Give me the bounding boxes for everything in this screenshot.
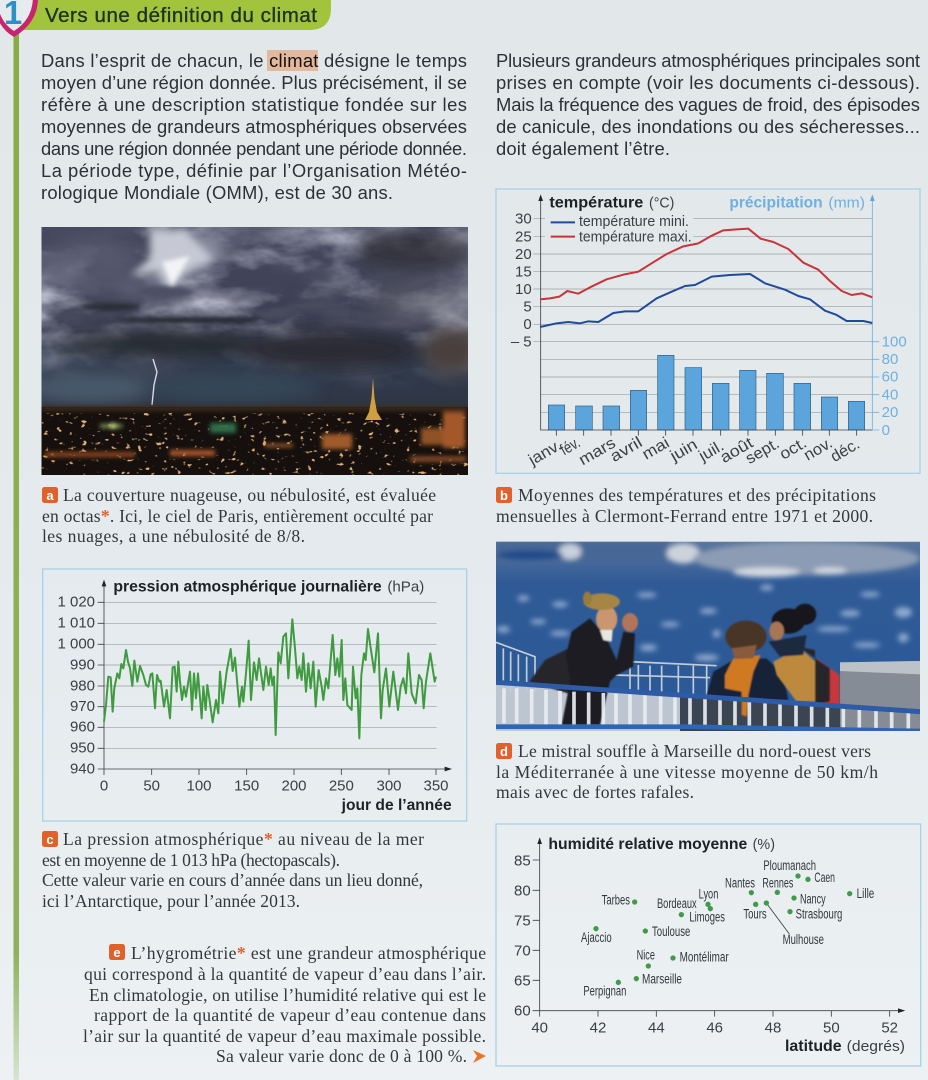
left green margin bar [14, 25, 19, 1080]
chart titles: (mm) [828, 194, 865, 211]
city labels: Marseille [642, 971, 682, 986]
precipitation scale: 80 [882, 351, 898, 368]
badge b [496, 487, 512, 503]
pressure scale: 980 [70, 677, 95, 694]
caption e: En climatologie, on utilise l’humidité relative qui est le [89, 985, 486, 1005]
intro text left column: moyen d’une région donnée. Plus précisément, il se [41, 72, 467, 93]
day scale: 50 [143, 778, 160, 795]
x axis title: latitude [785, 1038, 842, 1055]
city labels: Nice [637, 948, 655, 963]
city labels: Lille [857, 886, 874, 901]
caption a: les nuages, a une nébulosité de 8/8. [42, 526, 305, 546]
caption d: mais avec de fortes rafales. [496, 782, 694, 802]
precipitation scale: 100 [882, 334, 907, 351]
temperature scale: 10 [515, 281, 532, 298]
grey wall [840, 661, 920, 731]
caption e: l’air sur la quantité de vapeur d’eau maximale possible. [83, 1026, 486, 1046]
temperature scale: – 5 [511, 334, 532, 351]
caption b: Moyennes des températures et des précipitations [518, 485, 876, 505]
badge e [109, 944, 125, 960]
axes [533, 837, 905, 1017]
month labels: juin [667, 436, 701, 466]
intro text right column: doit également l’être. [496, 138, 670, 159]
precipitation scale: 60 [882, 369, 898, 386]
precipitation scale: 20 [882, 404, 898, 421]
day scale: 350 [423, 778, 449, 795]
latitude scale: 44 [648, 1019, 665, 1036]
precipitation scale: 0 [882, 422, 890, 439]
maximum temperature curve [540, 229, 872, 299]
month labels: avril [607, 434, 645, 466]
city labels: Tarbes [602, 893, 630, 908]
pressure scale: 950 [70, 740, 95, 757]
icon: orange arrow [473, 1050, 486, 1063]
intro text left column: dans une région donnée pendant une période donnée. [41, 138, 467, 159]
intro text right column: de canicule, des inondations ou des sécheresses... [496, 116, 920, 137]
chart titles: température [549, 194, 644, 211]
city labels: Tours [743, 907, 767, 922]
caption b: b [500, 488, 508, 503]
caption c: La pression atmosphérique* au niveau de la mer [63, 829, 424, 849]
latitude scale: 50 [823, 1019, 840, 1036]
section header [0, 0, 331, 37]
legend [551, 214, 692, 246]
caption b [496, 485, 876, 526]
intro text left column: La période type, définie par l’Organisation Météo- [41, 160, 467, 181]
latitude scale [531, 1019, 898, 1036]
lower deck and shadows [496, 682, 680, 731]
badge a [42, 487, 58, 503]
caption c: Cette valeur varie en cours d’année dans un lieu donné, [42, 870, 423, 890]
humidity scale: 80 [514, 882, 531, 899]
pressure scale: 1 010 [57, 615, 95, 632]
latitude scale: 46 [706, 1019, 723, 1036]
lightning bolt [152, 359, 157, 405]
panel: atmospheric pressure chart [43, 569, 467, 821]
city labels: Ajaccio [581, 930, 612, 945]
caption d: d [500, 744, 508, 759]
humidity scale: 85 [514, 852, 531, 869]
chart titles: précipitation [729, 194, 823, 211]
photo d: mistral in Marseille [496, 542, 920, 731]
temperature scale: 15 [515, 264, 532, 281]
pressure scale: 940 [70, 760, 95, 777]
precipitation scale [882, 334, 907, 439]
caption b: mensuelles à Clermont-Ferrand entre 1971 et 2000. [496, 506, 873, 526]
x axis title: jour de l’année [341, 797, 452, 814]
month labels: nov. [801, 435, 836, 464]
temperature scale: 0 [523, 316, 532, 333]
city at night [42, 407, 468, 475]
legend: température mini. [579, 214, 689, 230]
back railing [496, 642, 717, 695]
caption e: rapport de la quantité de vapeur d’eau contenue dans [94, 1005, 486, 1025]
caption d [496, 741, 878, 802]
photo a: storm over Paris [25, 227, 482, 475]
intro text left column: réfère à une description statistique fondée sur les [41, 94, 467, 115]
city labels: Caen [814, 870, 835, 885]
humidity scale: 75 [514, 912, 531, 929]
day scale: 0 [100, 778, 108, 795]
day scale: 300 [376, 778, 402, 795]
city labels: Montélimar [680, 950, 729, 965]
person middle [707, 621, 788, 717]
humidity scale: 70 [514, 942, 531, 959]
caption e: Sa valeur varie donc de 0 à 100 %. [216, 1046, 467, 1066]
city labels: Lyon [699, 887, 718, 902]
month labels: janv. [525, 437, 565, 470]
day scale [100, 778, 449, 795]
badge d [496, 743, 512, 759]
caption a: La couverture nuageuse, ou nébulosité, est évaluée [63, 485, 436, 505]
caption e [83, 943, 486, 1066]
chart titles: (°C) [649, 194, 674, 211]
caption e: qui correspond à la quantité de vapeur d’eau dans l’air. [84, 964, 486, 984]
latitude scale: 52 [881, 1019, 898, 1036]
temperature scale: 30 [515, 211, 532, 228]
pressure scale: 1 000 [57, 636, 95, 653]
month labels: juil. [695, 437, 727, 466]
daily pressure curve [104, 619, 436, 738]
city labels: Bordeaux [657, 896, 697, 911]
axes [538, 194, 879, 436]
month labels: août [717, 434, 757, 467]
city labels: Ploumanach [763, 858, 816, 873]
caption c: ici l’Antarctique, pour l’année 2013. [42, 891, 300, 911]
city dots [593, 873, 852, 985]
caption d: Le mistral souffle à Marseille du nord-ouest vers [518, 741, 871, 761]
temperature scale: 25 [515, 229, 532, 246]
month labels [525, 434, 863, 470]
caption c [42, 829, 424, 911]
heading text: Vers une définition du climat [45, 4, 317, 27]
intro text left column [41, 50, 467, 203]
day scale: 150 [234, 778, 259, 795]
pressure scale [57, 594, 95, 777]
pressure scale: 960 [70, 719, 95, 736]
person right [768, 604, 839, 705]
city labels: Nantes [725, 875, 755, 890]
x axis title: (degrés) [847, 1038, 905, 1055]
city labels: Nancy [800, 891, 826, 906]
Mulhouse leader line [766, 903, 789, 934]
panel: temperature and precipitation chart [496, 189, 920, 473]
precipitation scale: 40 [882, 386, 898, 403]
month labels: mars [576, 435, 619, 469]
temperature scale [511, 211, 532, 351]
temperature scale: 5 [523, 299, 532, 316]
pressure scale: 1 020 [57, 594, 95, 611]
caption a: en octas*. Ici, le ciel de Paris, entièrement occulté par [42, 506, 433, 526]
badge c [42, 831, 58, 847]
humidity scale [514, 852, 531, 1019]
legend: température maxi. [579, 230, 692, 246]
minimum temperature curve [540, 274, 872, 327]
person left [529, 592, 638, 725]
city labels: Toulouse [652, 924, 690, 939]
pressure scale: 970 [70, 698, 95, 715]
intro text left column: Dans l’esprit de chacun, le climat désigne le temps [41, 50, 467, 71]
caption c: c [46, 832, 54, 847]
Eiffel tower [365, 378, 382, 420]
caption e: L’hygrométrie* est une grandeur atmosphérique [131, 943, 486, 963]
intro text right column: Mais la fréquence des vagues de froid, des épisodes [496, 94, 920, 115]
chart title: (hPa) [387, 579, 424, 596]
caption e: e [113, 945, 121, 960]
latitude scale: 42 [590, 1019, 606, 1036]
month labels: sept. [743, 435, 783, 468]
day scale: 200 [281, 778, 307, 795]
city labels: Mulhouse [783, 932, 824, 947]
caption d: la Méditerranée à une vitesse moyenne de 50 km/h [496, 762, 878, 782]
section number shield [0, 0, 38, 37]
city labels: Rennes [762, 875, 793, 890]
chart title: pression atmosphérique journalière [113, 579, 382, 596]
day scale: 250 [329, 778, 354, 795]
latitude scale: 40 [531, 1019, 548, 1036]
chart titles [549, 194, 865, 211]
intro text left column: rologique Mondiale (OMM), est de 30 ans. [41, 182, 393, 203]
city labels [581, 858, 874, 998]
caption a [42, 485, 436, 546]
highlight on the word climat [267, 50, 318, 71]
city labels: Perpignan [583, 983, 626, 998]
header green tab [14, 0, 331, 36]
day scale: 100 [186, 778, 212, 795]
precipitation bars [548, 355, 865, 430]
x axis title [785, 1038, 905, 1055]
month labels: déc. [828, 436, 863, 466]
city labels: Limoges [689, 909, 725, 924]
humidity scale: 65 [514, 972, 531, 989]
temperature scale: 20 [515, 246, 532, 263]
city labels: Strasbourg [796, 907, 842, 922]
intro text right column: Plusieurs grandeurs atmosphériques principales sont [496, 50, 920, 71]
caption c: est en moyenne de 1 013 hPa (hectopascals). [42, 850, 340, 870]
axes [98, 580, 452, 775]
month labels: mai [639, 435, 673, 463]
latitude scale: 48 [765, 1019, 781, 1036]
caption a: a [46, 488, 54, 503]
front railing [504, 688, 908, 730]
intro text right column: prises en compte (voir les documents ci-dessous). [496, 72, 920, 93]
intro text left column: moyennes de grandeurs atmosphériques observées [41, 116, 467, 137]
intro text right column [496, 50, 920, 159]
panel: relative humidity chart [496, 824, 921, 1066]
month labels: oct. [777, 435, 810, 463]
month labels: fév. [557, 434, 583, 459]
pressure scale: 990 [70, 656, 95, 673]
humidity scale: 60 [514, 1002, 531, 1019]
chart title: humidité relative moyenne [548, 836, 748, 853]
chart title: (%) [753, 836, 775, 853]
